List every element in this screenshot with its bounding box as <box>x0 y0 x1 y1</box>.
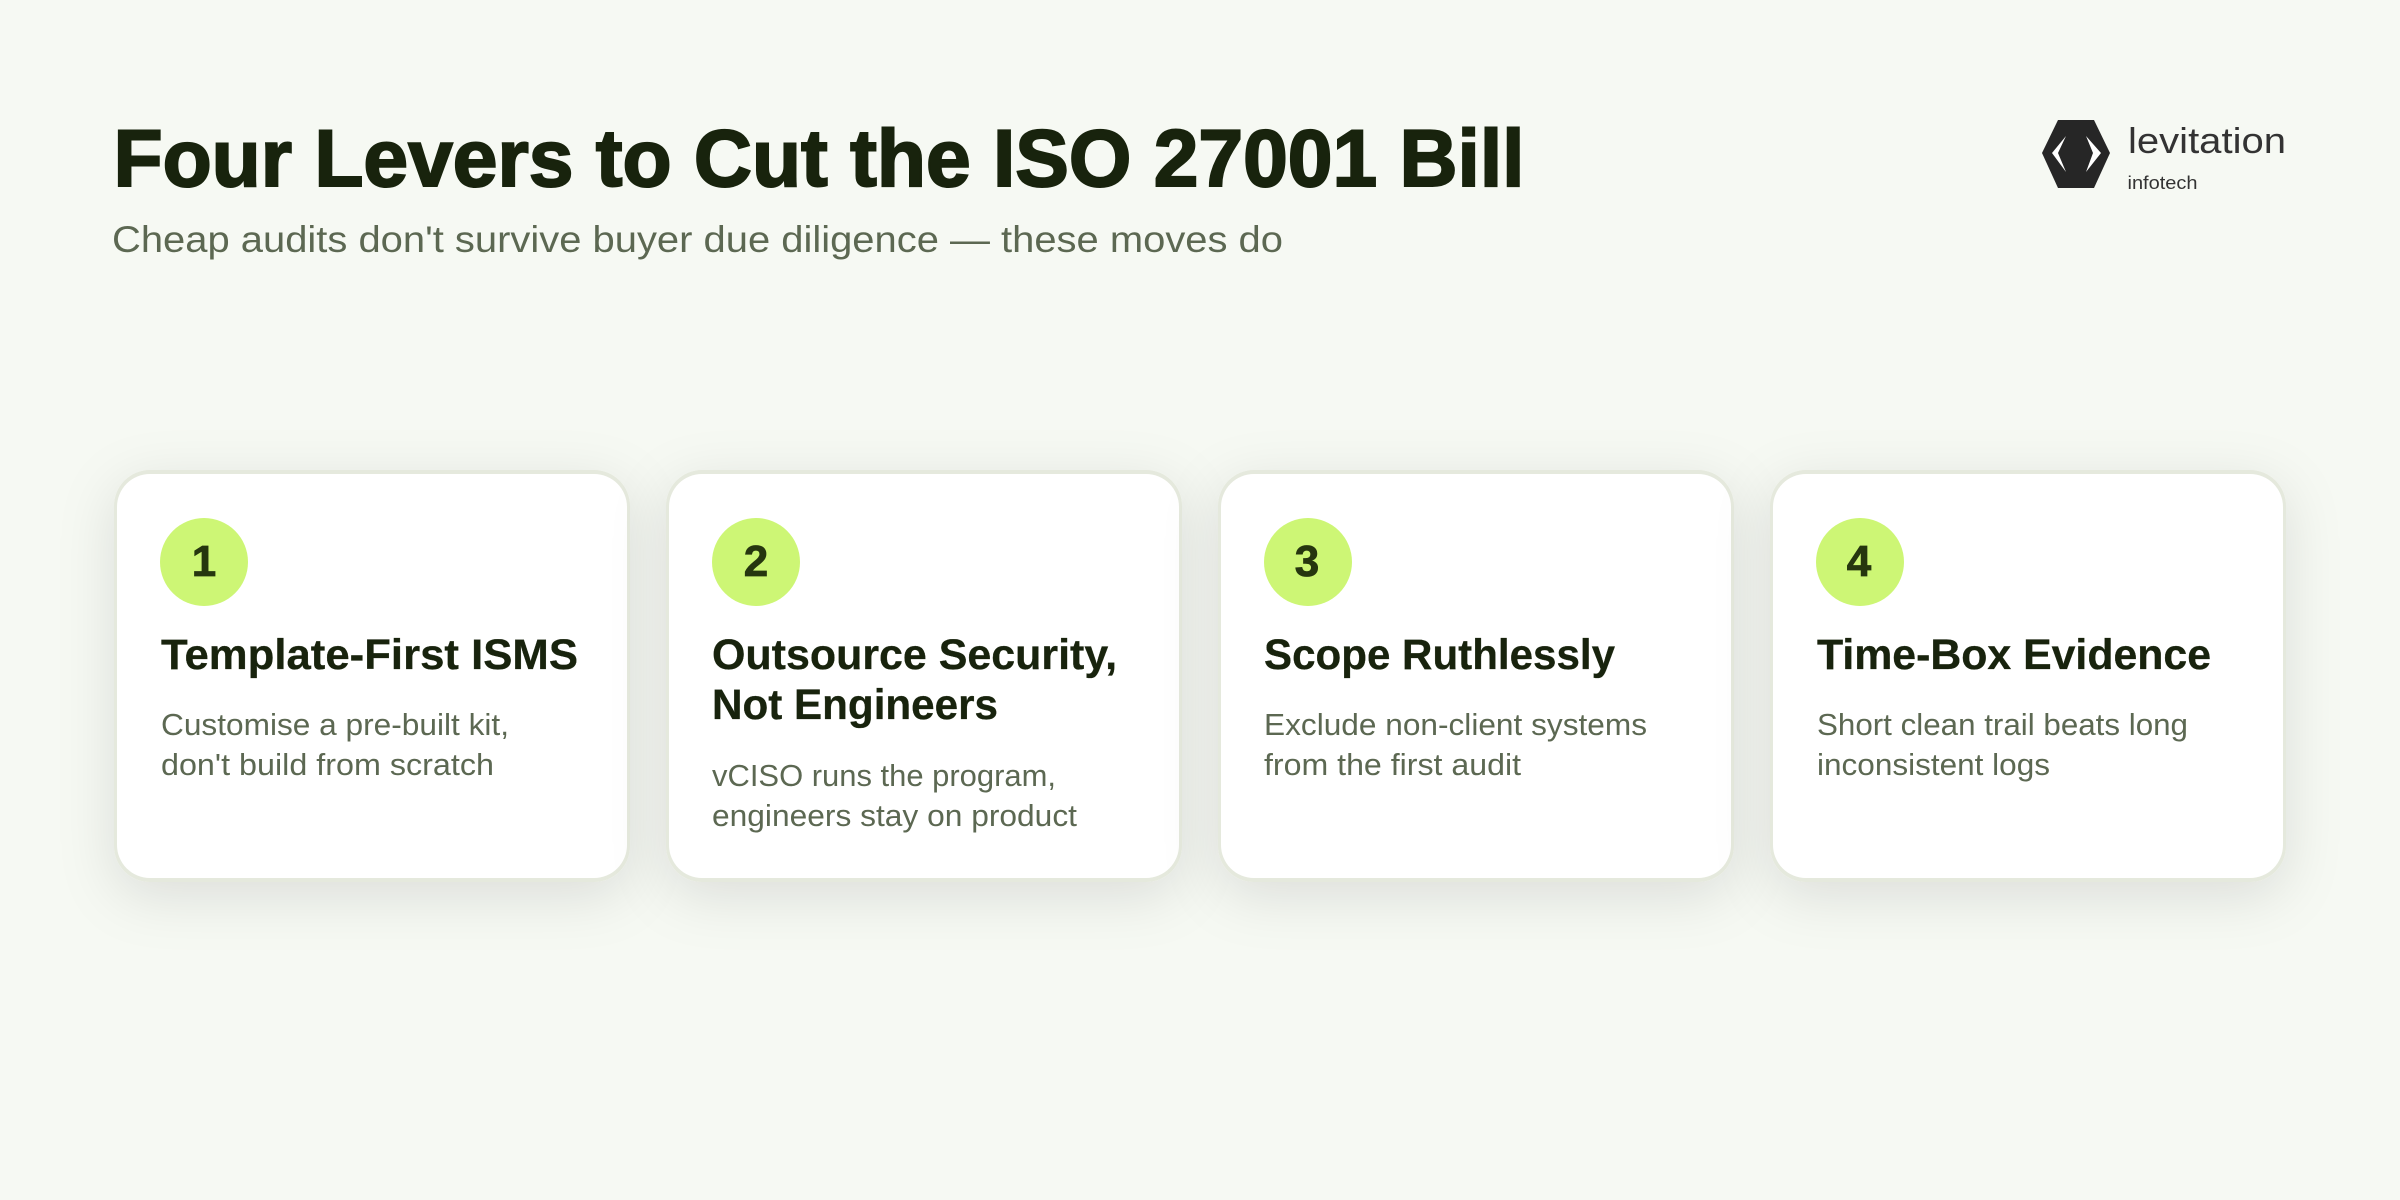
heading: Outsource Security, Not Engineers: Outsource Security, <box>712 631 1117 679</box>
heading: Outsource Security, Not Engineers <box>712 631 1117 729</box>
number badge 1 <box>160 518 248 606</box>
number badge 4 <box>1816 518 1904 606</box>
panel: lever 1 <box>114 470 630 882</box>
logo wordmark: levitation <box>2128 120 2286 161</box>
description <box>1817 707 2188 782</box>
icon: hexagon with chevrons <box>2042 120 2110 188</box>
logo: levitation infotech <box>2042 120 2286 193</box>
panel: lever 4 <box>1770 470 2286 882</box>
subtitle: Cheap audits don't survive buyer due diligence — these moves do <box>112 219 1283 260</box>
description: don't build from scratch <box>161 747 494 782</box>
description: engineers stay on product <box>712 798 1077 833</box>
description: inconsistent logs <box>1817 747 2050 782</box>
panel: lever 3 <box>1218 470 1734 882</box>
number badge 4: 4 <box>1847 537 1872 586</box>
number badge 2: 2 <box>744 537 768 586</box>
description <box>161 707 509 782</box>
description: from the first audit <box>1264 747 1521 782</box>
heading: Template-First ISMS: Template-First ISMS <box>161 631 578 679</box>
description <box>712 758 1077 833</box>
heading: Scope Ruthlessly: Scope Ruthlessly <box>1264 631 1615 679</box>
heading: Time-Box Evidence: Time-Box Evidence <box>1817 631 2211 679</box>
number badge 3 <box>1264 518 1352 606</box>
number badge 3: 3 <box>1295 537 1319 586</box>
description: Exclude non-client systems <box>1264 707 1647 742</box>
number badge 1: 1 <box>192 537 216 586</box>
panel: lever 2 <box>666 470 1182 882</box>
logo tagline: infotech <box>2128 173 2198 193</box>
number badge 2 <box>712 518 800 606</box>
description: Short clean trail beats long <box>1817 707 2188 742</box>
title: Four Levers to Cut the ISO 27001 Bill <box>114 114 1524 204</box>
description: vCISO runs the program, <box>712 758 1056 793</box>
heading: Outsource Security, Not Engineers: Not Engineers <box>712 681 998 729</box>
description <box>1264 707 1647 782</box>
description: Customise a pre-built kit, <box>161 707 509 742</box>
